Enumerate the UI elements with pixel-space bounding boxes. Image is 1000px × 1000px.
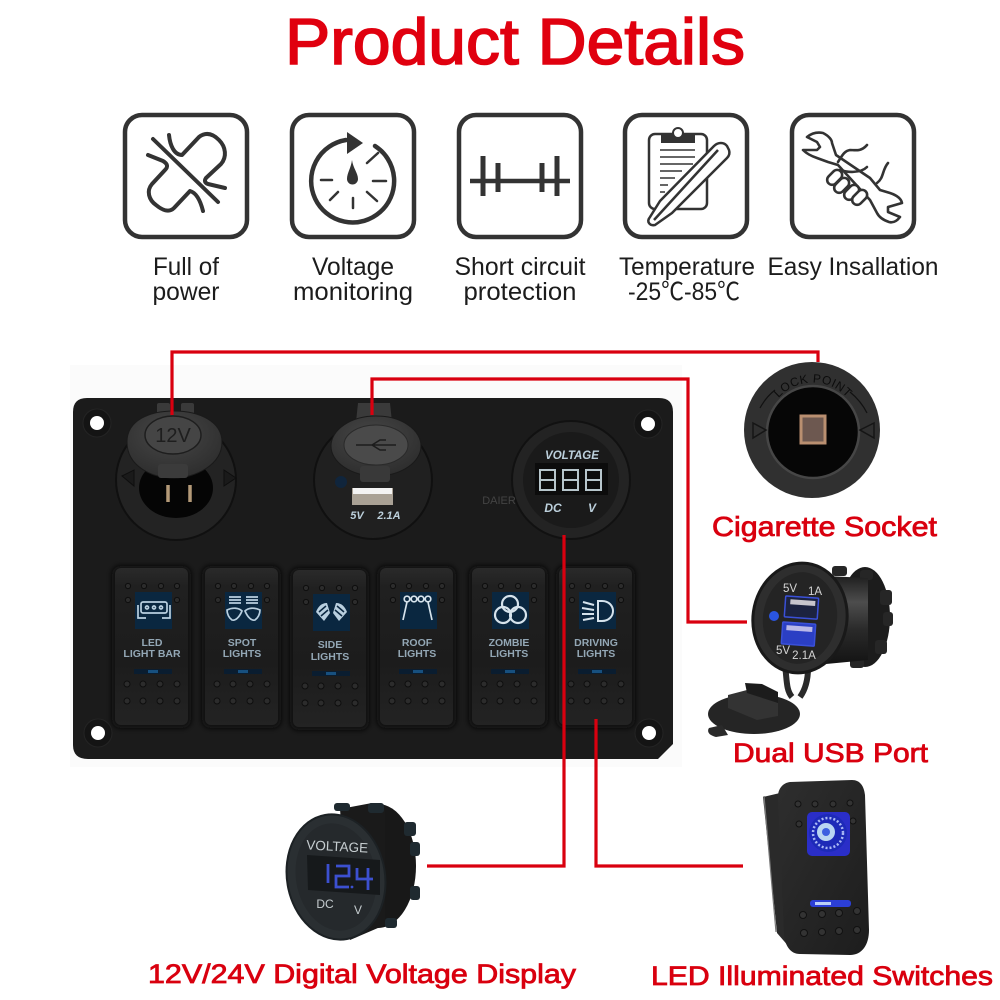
product: digital voltage meter: VOLTAGE	[306, 837, 368, 856]
12V socket	[116, 403, 236, 540]
feature: temperature	[619, 115, 755, 306]
label: dual USB port: Dual USB Port	[733, 738, 929, 768]
label: illuminated switches: LED Illuminated Switches	[651, 961, 993, 991]
label: cigarette socket: Cigarette Socket	[712, 511, 937, 542]
product: illuminated rocker switch	[763, 780, 869, 955]
switch: LED light bar: LED	[142, 637, 163, 649]
label: -25℃-85℃	[628, 278, 740, 306]
switch: zombie lights: ZOMBIE	[489, 637, 529, 649]
label	[619, 253, 755, 306]
switch: side lights: SIDE	[318, 639, 342, 651]
label: Voltage	[312, 253, 394, 281]
switch: LED light bar	[112, 566, 191, 728]
label	[454, 253, 586, 306]
product: digital voltage meter: DC	[316, 897, 334, 911]
switch: spot lights	[202, 566, 281, 728]
switch: driving lights: LIGHTS	[577, 648, 615, 660]
switch: roof lights: ROOF	[402, 637, 433, 649]
title: Product Details	[285, 5, 745, 78]
label: voltage display: 12V/24V Digital Voltage Display	[148, 959, 577, 989]
watermark: DAIER	[482, 495, 516, 507]
product: dual USB port: 5V	[776, 645, 790, 657]
product: dual USB port: 5V	[783, 583, 797, 595]
feature: full of power	[125, 115, 247, 306]
switch: roof lights	[377, 566, 456, 728]
product: dual USB port	[708, 557, 893, 737]
label: power	[152, 278, 220, 306]
voltage meter: DC	[544, 501, 562, 515]
panel: switch panel	[73, 398, 673, 759]
icon: gauge	[292, 115, 414, 237]
product: dual USB port: 1A	[808, 586, 822, 598]
switch: driving lights	[556, 566, 635, 728]
label	[152, 253, 220, 306]
switch: zombie lights	[469, 566, 548, 728]
switch: side lights: LIGHTS	[311, 651, 349, 663]
switch: roof lights: LIGHTS	[398, 648, 436, 660]
callout lines	[172, 352, 818, 866]
switch: spot lights: SPOT	[228, 637, 257, 649]
USB socket	[314, 403, 432, 539]
product: cigarette socket	[744, 362, 880, 498]
switch: spot lights: LIGHTS	[223, 648, 261, 660]
voltage meter: VOLTAGE	[545, 450, 599, 462]
switch: LED light bar: LIGHT BAR	[123, 648, 181, 660]
product: dual USB port: 2.1A	[792, 650, 816, 662]
USB socket: 2.1A	[376, 510, 401, 522]
label: Temperature	[619, 253, 755, 281]
product: digital voltage meter: V	[354, 903, 362, 917]
feature: easy installation	[768, 115, 938, 281]
icon: hand and wrench	[792, 115, 914, 237]
voltage meter: V	[588, 501, 597, 515]
feature: voltage monitoring	[292, 115, 414, 306]
product: cigarette socket: LOCK POINT	[774, 374, 852, 398]
label	[293, 253, 413, 306]
product: digital voltage meter	[277, 803, 420, 948]
icon: circuit	[459, 115, 581, 237]
label: protection	[464, 278, 576, 306]
label: monitoring	[293, 278, 413, 306]
USB socket: 5V	[350, 510, 365, 522]
12V socket: 12V	[155, 425, 191, 447]
label: Full of	[153, 253, 219, 281]
switch: driving lights: DRIVING	[574, 637, 618, 649]
voltage meter	[512, 421, 630, 539]
switch: side lights	[290, 568, 369, 730]
feature: short circuit protection	[454, 115, 586, 306]
icon: plug crossed	[125, 115, 247, 237]
icon: clipboard and thermometer	[625, 115, 747, 237]
label: Short circuit	[454, 253, 586, 281]
switch: zombie lights: LIGHTS	[490, 648, 528, 660]
label: Easy Insallation	[768, 253, 938, 281]
mounting holes	[83, 409, 663, 747]
